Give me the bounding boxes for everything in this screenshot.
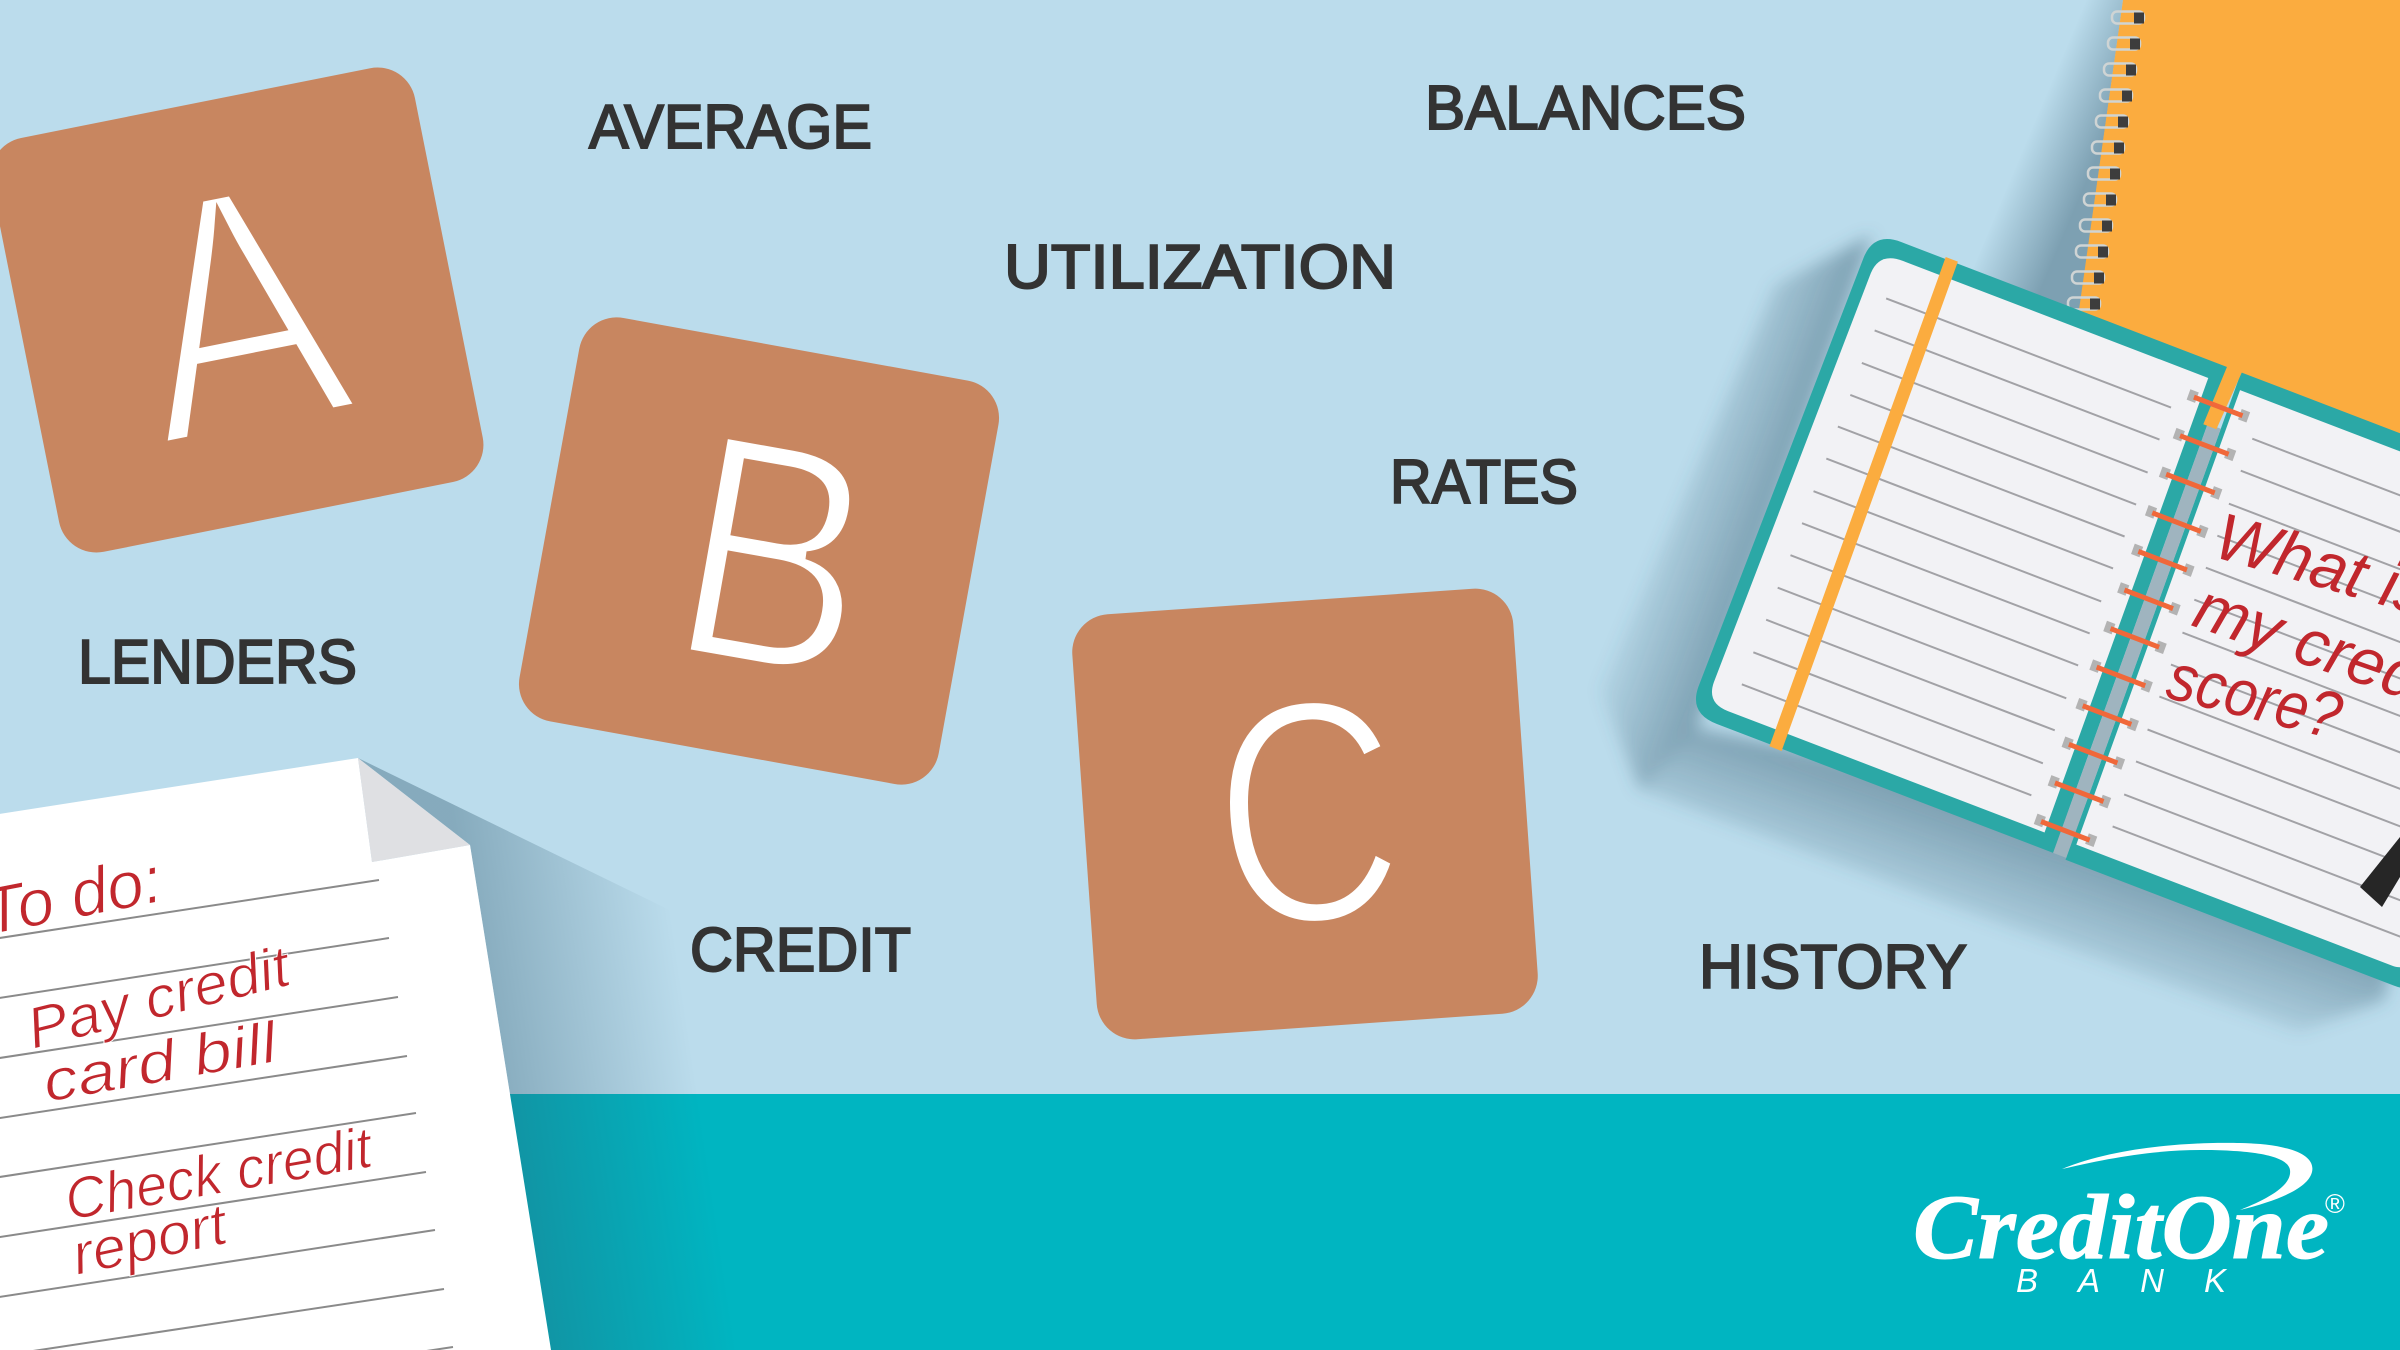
to-do item: pay credit card bill: card bill bbox=[38, 1009, 284, 1115]
label: BALANCES: BALANCES bbox=[1425, 74, 1746, 143]
note rule lines bbox=[0, 880, 453, 1350]
to-do item: check credit report: Check credit bbox=[60, 1114, 379, 1233]
tile: letter C: C bbox=[1202, 627, 1413, 996]
open teal notebook bbox=[1688, 224, 2400, 995]
tile: letter B bbox=[513, 311, 1005, 791]
right page bbox=[2076, 390, 2400, 972]
label: RATES: RATES bbox=[1390, 448, 1578, 517]
logo registered mark: ® bbox=[2325, 1189, 2345, 1219]
left page bbox=[1706, 248, 2208, 832]
spiral rings bbox=[2034, 389, 2250, 847]
notebook shadow bbox=[1600, 235, 2400, 1032]
label: CREDIT: CREDIT bbox=[690, 916, 911, 985]
elastic at spine bbox=[2203, 362, 2243, 431]
logo swoosh bbox=[2062, 1143, 2312, 1210]
teal footer band bbox=[0, 1094, 2400, 1350]
page rule lines bbox=[1742, 297, 2400, 937]
right cover bbox=[2066, 372, 2400, 995]
icon: pen bbox=[2360, 837, 2400, 907]
spine strip bbox=[2053, 424, 2221, 858]
logo wordmark: CreditOne bbox=[1913, 1176, 2329, 1278]
handwritten question on notebook bbox=[2161, 498, 2400, 753]
label: UTILIZATION: UTILIZATION bbox=[1004, 233, 1396, 302]
logo: Credit One Bank bbox=[1913, 1143, 2345, 1299]
label: AVERAGE: AVERAGE bbox=[589, 93, 872, 162]
to-do item: check credit report bbox=[60, 1114, 379, 1288]
to-do item: pay credit card bill bbox=[20, 933, 299, 1115]
logo BANK: BANK bbox=[2016, 1262, 2228, 1299]
tile: letter C bbox=[1070, 586, 1540, 1042]
label: LENDERS: LENDERS bbox=[78, 628, 357, 697]
label: HISTORY: HISTORY bbox=[1699, 933, 1967, 1002]
to-do item: pay credit card bill: Pay credit bbox=[20, 933, 299, 1062]
orange notebook bbox=[1960, 0, 2400, 450]
to-do note paper bbox=[0, 758, 551, 1350]
page fold bbox=[358, 758, 470, 862]
tile: letter A: A bbox=[101, 101, 376, 519]
tile: letter B: B bbox=[652, 362, 899, 748]
to-do item: check credit report: report bbox=[66, 1191, 235, 1288]
tile: letter A bbox=[0, 61, 490, 559]
handwritten question on notebook: score? bbox=[2161, 639, 2350, 753]
elastic band on left page bbox=[1769, 257, 1958, 751]
left cover bbox=[1689, 228, 2228, 853]
notebook spiral binding bbox=[2068, 12, 2144, 310]
paper shadow bbox=[358, 758, 760, 1350]
